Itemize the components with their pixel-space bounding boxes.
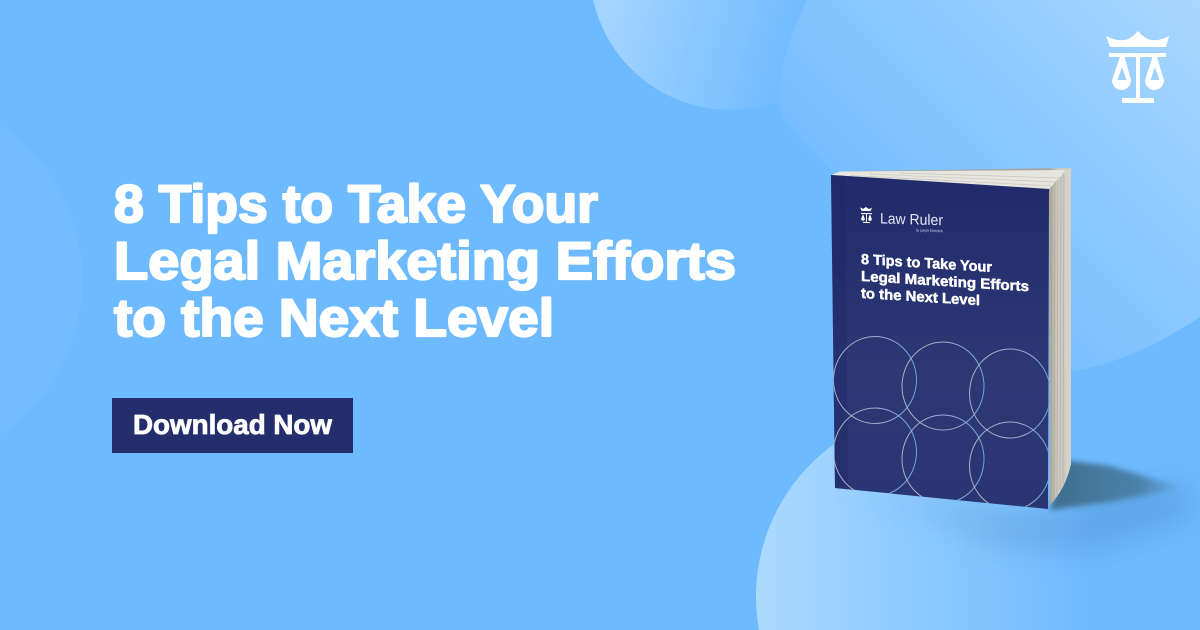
title: 8 Tips to Take Your <box>114 175 598 234</box>
background shape: top right blob <box>779 0 1200 373</box>
cover circles <box>834 336 1050 510</box>
download button <box>112 398 353 453</box>
book cover <box>831 175 1050 510</box>
logo icon: crown and scales <box>1106 31 1169 103</box>
title: Legal Marketing Efforts <box>114 232 736 291</box>
book contact shadow <box>1050 460 1184 510</box>
cover title: 8 Tips to Take Your <box>861 252 992 276</box>
cover title: to the Next Level <box>861 286 980 309</box>
background shape: bottom right circle <box>756 409 1132 630</box>
background shape: top circle <box>593 0 867 110</box>
cover title: Legal Marketing Efforts <box>861 269 1029 295</box>
cover logo: Law Ruler <box>880 210 943 229</box>
title <box>114 175 736 348</box>
book pages <box>831 168 1071 505</box>
book soft shadow <box>838 482 1190 552</box>
title: to the Next Level <box>114 289 554 348</box>
cover title <box>861 252 1029 312</box>
background shape: left circle <box>0 124 82 436</box>
cover logo: by Lawyer Essentials <box>916 227 943 233</box>
cover logo <box>860 207 943 233</box>
download button: Download Now <box>133 409 333 440</box>
